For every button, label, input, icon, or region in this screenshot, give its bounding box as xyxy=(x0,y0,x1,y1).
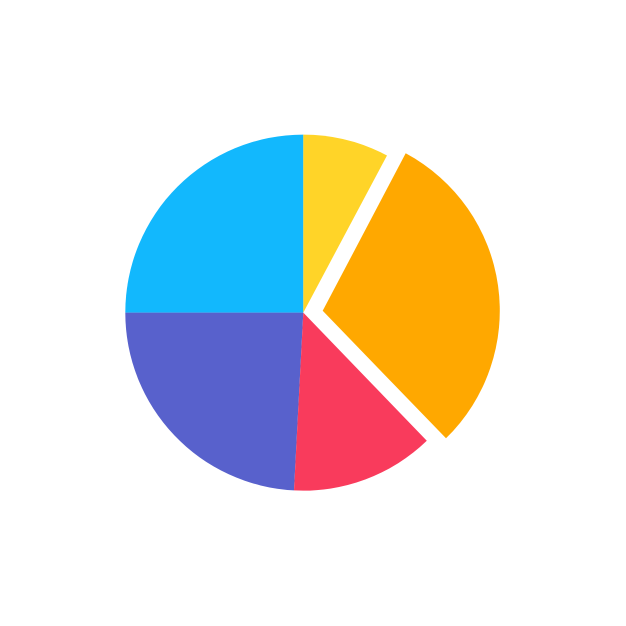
slice: purple xyxy=(125,313,303,490)
slice: red xyxy=(294,313,427,491)
slice: yellow xyxy=(303,135,387,313)
slice: orange exploded xyxy=(323,153,500,438)
slice: blue xyxy=(125,135,303,313)
